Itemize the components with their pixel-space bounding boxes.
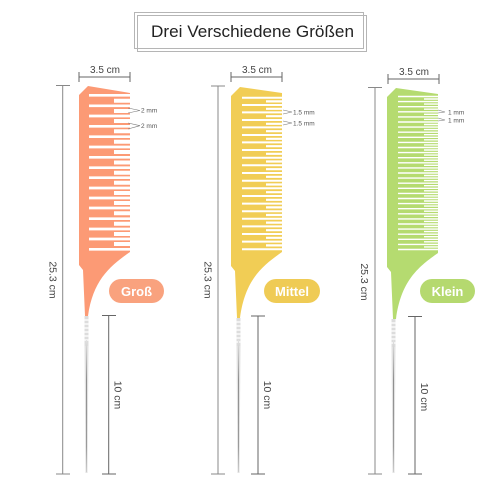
title xyxy=(134,12,366,52)
dimension: length large comb: 25.3 cm xyxy=(46,261,58,299)
dimension: pin large comb xyxy=(102,316,124,474)
title: Drei Verschiedene Größen xyxy=(151,22,354,41)
dimension: pin small comb: 10 cm xyxy=(418,383,430,412)
dimension: length small comb xyxy=(358,88,382,474)
panel: small comb xyxy=(387,88,439,473)
metal pin xyxy=(84,316,88,473)
callout: tooth spacing 2 mm xyxy=(128,108,157,130)
dimension: pin small comb xyxy=(408,316,430,474)
callout: tooth spacing 1 mm: 1 mm xyxy=(448,117,464,124)
dimension: pin medium comb xyxy=(251,316,273,474)
dimension: width large comb xyxy=(79,65,130,82)
comb body: orange xyxy=(79,86,130,316)
callout: tooth spacing 1 mm: 1 mm xyxy=(448,109,464,116)
dimension: width large comb: 3.5 cm xyxy=(90,65,120,76)
dimension: pin medium comb: 10 cm xyxy=(261,381,273,410)
label: Klein xyxy=(420,279,475,303)
callout: tooth spacing 1 mm xyxy=(438,109,464,124)
panel: large comb xyxy=(79,86,131,473)
dimension: width medium comb xyxy=(231,65,282,82)
dimension: width small comb xyxy=(388,67,439,84)
label: Mittel: Mittel xyxy=(275,284,309,299)
panel: medium comb xyxy=(231,87,283,473)
dimension: length medium comb xyxy=(202,86,225,474)
dimension: length large comb xyxy=(46,86,70,474)
comb body: yellow xyxy=(231,87,282,318)
callout: tooth spacing 1.5 mm: 1.5 mm xyxy=(293,109,315,116)
metal pin xyxy=(392,319,396,473)
dimension: width medium comb: 3.5 cm xyxy=(242,65,272,76)
label: Groß xyxy=(109,279,164,303)
dimension: length medium comb: 25.3 cm xyxy=(202,261,214,299)
dimension: width small comb: 3.5 cm xyxy=(399,67,429,78)
label: Mittel xyxy=(264,279,320,303)
label: Klein: Klein xyxy=(432,284,463,299)
callout: tooth spacing 2 mm: 2 mm xyxy=(141,123,157,130)
comb teeth: 1.5 mm xyxy=(242,98,283,249)
metal pin xyxy=(236,318,240,473)
callout: tooth spacing 1.5 mm xyxy=(283,109,315,127)
callout: tooth spacing 2 mm: 2 mm xyxy=(141,108,157,114)
dimension: pin large comb: 10 cm xyxy=(112,381,124,410)
comb teeth: 1 mm xyxy=(398,96,439,250)
dimension: length small comb: 25.3 cm xyxy=(358,263,370,301)
callout: tooth spacing 1.5 mm: 1.5 mm xyxy=(293,120,315,127)
label: Groß: Groß xyxy=(121,284,152,299)
comb teeth: 2 mm xyxy=(89,95,131,249)
comb body: green xyxy=(387,88,438,319)
